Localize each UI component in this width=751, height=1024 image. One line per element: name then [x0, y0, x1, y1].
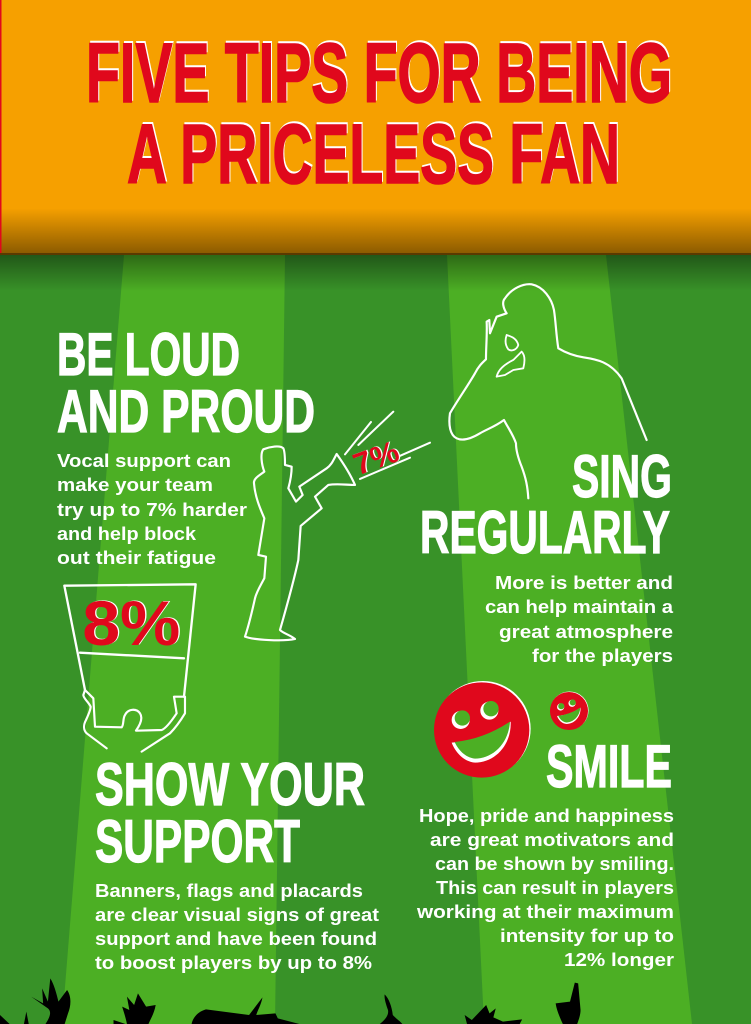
- text: show your support body: are clear visual signs of great: [95, 904, 379, 925]
- text: smile body: intensity for up to: [500, 925, 674, 946]
- heading: smile: SMILE: [546, 733, 672, 800]
- text: be loud body: and help block: [57, 523, 197, 544]
- text: smile body: can be shown by smiling.: [435, 853, 674, 874]
- icon: singing fan: [449, 284, 647, 498]
- header banner: [0, 0, 751, 255]
- pitch background: [0, 254, 751, 1024]
- text: smile body: 12% longer: [564, 949, 674, 970]
- text: show your support body: Banners, flags and placards: [95, 880, 363, 901]
- label: 8%: 8%: [82, 589, 180, 659]
- heading: be loud and proud: AND PROUD: [57, 378, 315, 445]
- text: sing body: for the players: [532, 645, 673, 666]
- label: 7%: 7%: [350, 434, 405, 482]
- text: smile body: [416, 805, 674, 970]
- heading: sing regularly: SING: [572, 443, 672, 510]
- text: be loud body: [57, 450, 247, 568]
- icon: large smiley: [434, 681, 531, 778]
- text: sing body: [485, 572, 674, 666]
- heading: show your support: SUPPORT: [95, 808, 300, 875]
- text: sing body: can help maintain a: [485, 596, 674, 617]
- icon: fan with megaphone: [245, 412, 430, 640]
- text: show your support body: support and have been found: [95, 928, 377, 949]
- text: show your support body: to boost players by up to 8%: [95, 952, 372, 973]
- label: 7%: 7%: [349, 434, 404, 482]
- text: be loud body: try up to 7% harder: [57, 499, 247, 520]
- heading: sing regularly: [420, 443, 672, 566]
- icon: banner with fan: [64, 584, 196, 752]
- text: be loud body: out their fatigue: [57, 547, 216, 568]
- label: 8%: 8%: [84, 588, 182, 658]
- crowd silhouette: [0, 978, 581, 1024]
- heading: show your support: [95, 751, 365, 875]
- text: smile body: Hope, pride and happiness: [419, 805, 674, 826]
- heading: be loud and proud: BE LOUD: [57, 321, 240, 388]
- text: smile body: This can result in players: [436, 877, 674, 898]
- text: smile body: working at their maximum: [416, 901, 674, 922]
- text: sing body: More is better and: [495, 572, 673, 593]
- text: smile body: are great motivators and: [430, 829, 674, 850]
- text: be loud body: make your team: [57, 474, 213, 495]
- icon: small smiley: [550, 691, 589, 730]
- text: sing body: great atmosphere: [499, 621, 673, 642]
- heading: be loud and proud: [57, 321, 315, 445]
- text: be loud body: Vocal support can: [57, 450, 231, 471]
- title: [86, 24, 673, 201]
- text: show your support body: [95, 880, 379, 973]
- heading: show your support: SHOW YOUR: [95, 751, 365, 818]
